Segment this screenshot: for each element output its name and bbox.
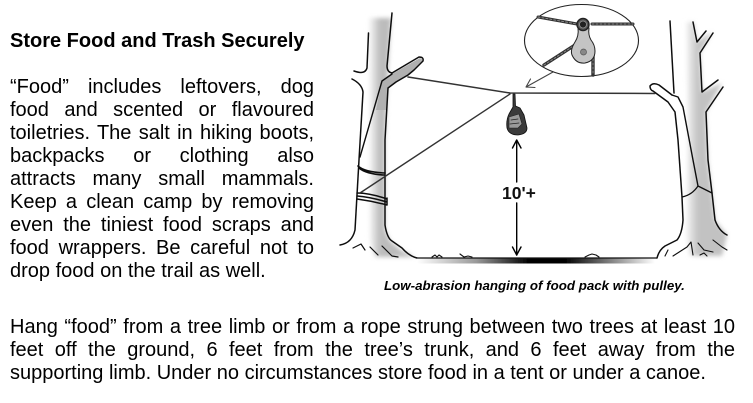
caption: Low-abrasion hanging of food pack with pulley. xyxy=(384,278,685,293)
text block: food description: “Food” includes leftovers, dog xyxy=(10,76,314,98)
text block: food description: Keep a clean camp by removing xyxy=(10,191,314,213)
text block: food description: food and scented or flavoured xyxy=(10,99,314,121)
text block: hanging instructions: feet off the ground, 6 feet from the tree’s trunk, and 6 feet away from the xyxy=(10,339,735,361)
arrow: to pulley detail xyxy=(526,72,553,88)
rope between trees xyxy=(360,77,655,193)
text block: hanging instructions xyxy=(10,316,735,384)
height label: 10'+ xyxy=(502,183,536,203)
text block: food description: drop food on the trail as well. xyxy=(10,260,266,282)
left tree xyxy=(340,13,423,258)
text block: food description: even the tiniest food scraps and xyxy=(10,214,314,236)
arrow: height measurement xyxy=(512,140,521,255)
text block: food description xyxy=(10,76,314,282)
food pack xyxy=(507,94,527,135)
pulley detail callout xyxy=(524,4,638,76)
text block: food description: toiletries. The salt in hiking boots, xyxy=(10,122,314,144)
text block: hanging instructions: Hang “food” from a tree limb or from a rope strung between two trees at least 10 xyxy=(10,316,735,338)
right tree xyxy=(650,21,727,258)
text block: food description: attracts many small mammals. xyxy=(10,168,314,190)
title: Store Food and Trash Securely xyxy=(10,30,305,52)
text block: food description: backpacks or clothing also xyxy=(10,145,314,167)
ground line xyxy=(417,254,657,264)
text block: food description: food wrappers. Be careful not to xyxy=(10,237,314,259)
text block: hanging instructions: supporting limb. Under no circumstances store food in a tent or under a canoe. xyxy=(10,362,706,384)
